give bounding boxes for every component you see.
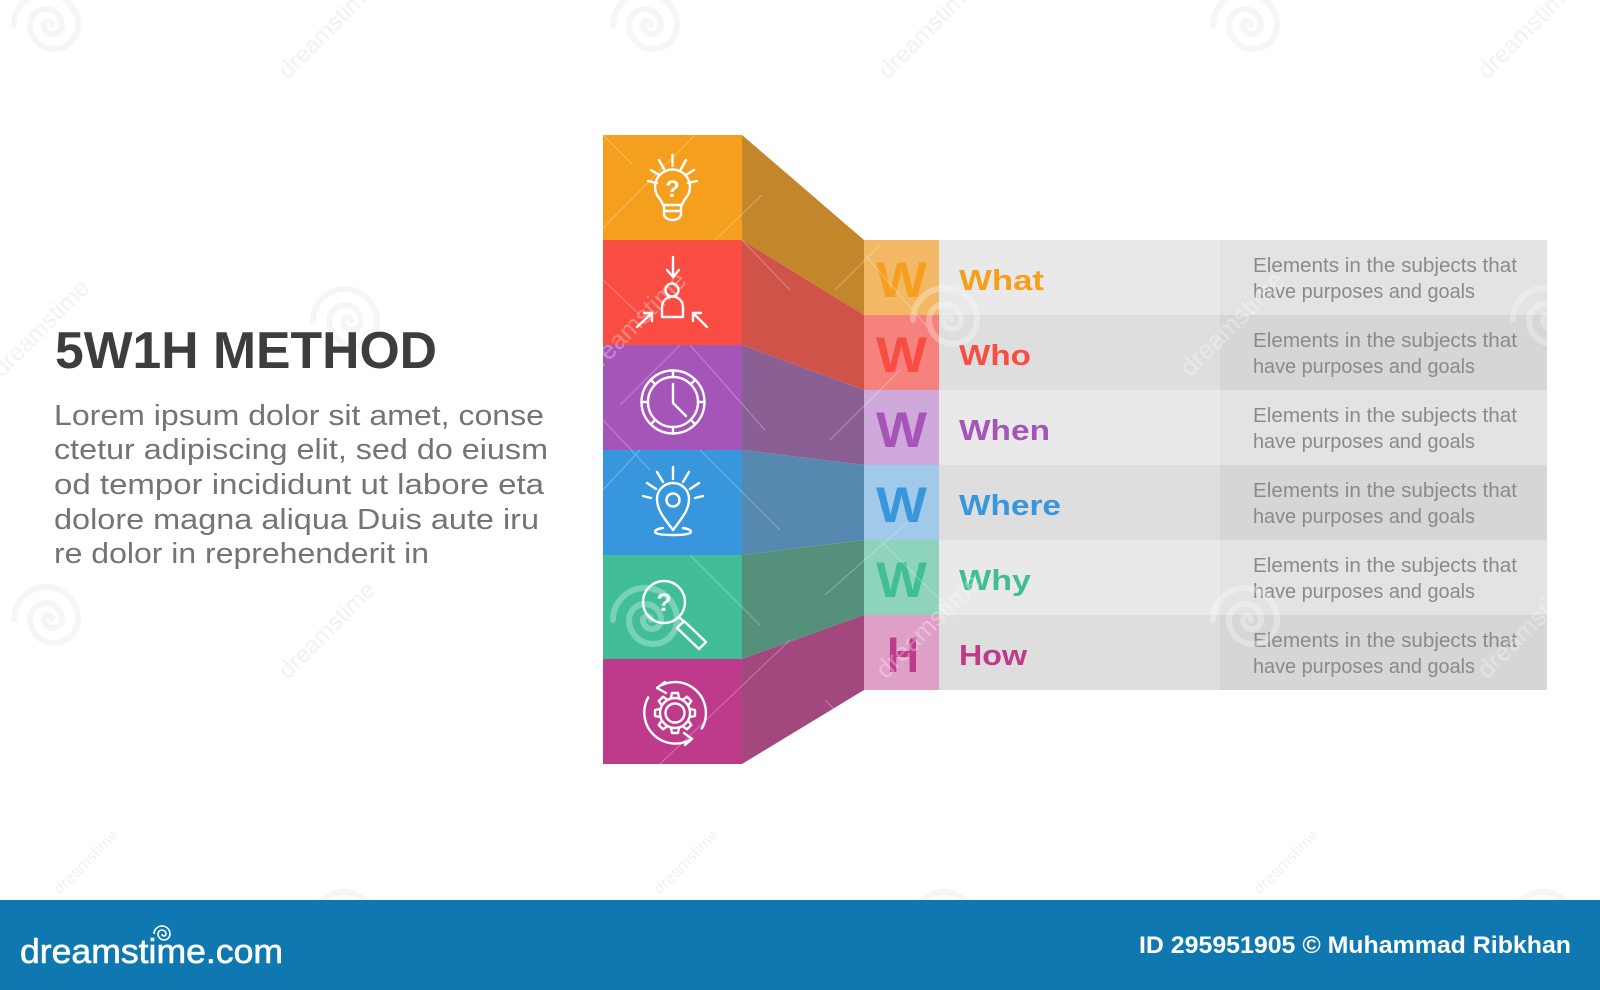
row: when: W [876, 402, 928, 458]
body text: re dolor in reprehenderit in [54, 538, 429, 570]
row: how: Elements in the subjects that [1253, 629, 1517, 652]
footer credit: ID 295951905 © Muhammad Ribkhan [1139, 932, 1571, 959]
row: where: have purposes and goals [1253, 505, 1475, 528]
row: why: Elements in the subjects that [1253, 554, 1517, 577]
row: how [864, 615, 1517, 690]
icon: gear with cycle arrows [644, 682, 706, 745]
row: who: Elements in the subjects that [1253, 329, 1517, 352]
icon: person with arrows [637, 257, 707, 327]
icon: magnifier with question mark [643, 581, 706, 649]
icon: light bulb with question mark: ? [665, 176, 680, 203]
row: how: have purposes and goals [1253, 655, 1475, 678]
text: dreamstime [651, 827, 722, 898]
body text: ctetur adipiscing elit, sed do eiusm [54, 434, 548, 466]
row: why [864, 540, 1517, 615]
row: why: W [876, 552, 928, 608]
text: dreamstime [575, 265, 692, 382]
row: when: Elements in the subjects that [1253, 404, 1517, 427]
row: who: have purposes and goals [1253, 355, 1475, 378]
body text: Lorem ipsum dolor sit amet, conse [54, 400, 544, 432]
foreground watermark [603, 135, 1577, 764]
text: dreamstime [273, 576, 381, 684]
row: where [864, 465, 1517, 540]
icon: location pin [643, 467, 703, 535]
row: who: W [876, 327, 928, 383]
row: what: Elements in the subjects that [1253, 254, 1517, 277]
row: where: Elements in the subjects that [1253, 479, 1517, 502]
row: why: have purposes and goals [1253, 580, 1475, 603]
row: how: H [887, 627, 919, 683]
icon: magnifier with question mark: ? [656, 589, 672, 617]
panel: rows background [939, 240, 1547, 690]
row: what: What [959, 265, 1044, 297]
icon: clock [642, 370, 704, 434]
title: 5W1H METHOD [55, 322, 437, 380]
body text [54, 400, 548, 570]
row: when: have purposes and goals [1253, 430, 1475, 453]
panel: stack perspective side faces [742, 135, 864, 764]
text: dreamstime [1173, 265, 1290, 382]
text: dreamstime [869, 567, 986, 684]
row: where: Where [959, 490, 1061, 522]
panel: colored stack front faces [603, 135, 742, 764]
row: how: How [959, 640, 1027, 672]
body text: dolore magna aliqua Duis aute iru [54, 504, 539, 536]
row: what: W [876, 252, 928, 308]
body text: od tempor incididunt ut labore eta [54, 469, 545, 501]
text: dreamstime [1251, 827, 1322, 898]
row: who [864, 315, 1517, 390]
row: what [864, 240, 1517, 315]
icon: light bulb with question mark [648, 155, 697, 220]
row: when: When [959, 415, 1050, 447]
row: what: have purposes and goals [1253, 280, 1475, 303]
footer logo: dreamstime.com [20, 933, 283, 971]
footer bar [0, 900, 1600, 990]
row: who: Who [959, 340, 1031, 372]
row: where: W [876, 477, 928, 533]
row: why: Why [959, 565, 1031, 597]
text: dreamstime [51, 827, 122, 898]
row: when [864, 390, 1517, 465]
text: dreamstime [1470, 567, 1587, 684]
